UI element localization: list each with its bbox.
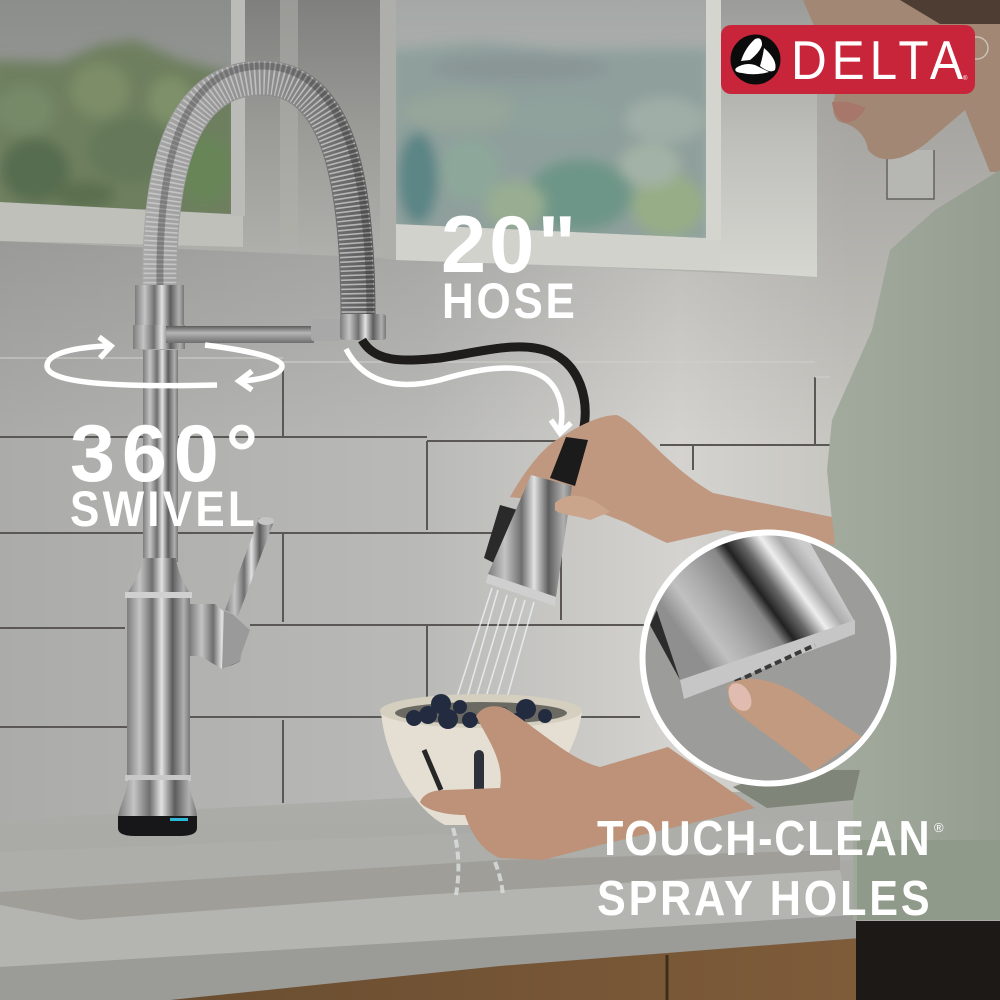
faucet lower body xyxy=(118,350,197,836)
faucet collar and swing arm xyxy=(133,285,386,349)
sweater cuff xyxy=(733,770,860,808)
sprayer head xyxy=(484,437,588,606)
label: touch-clean spray holes: SPRAY HOLES xyxy=(597,870,930,926)
Delta logo mark xyxy=(730,34,780,84)
window frame and sill xyxy=(0,0,817,277)
left window view of trees xyxy=(0,0,231,214)
colander bowl xyxy=(380,694,582,825)
upper hand holding sprayer xyxy=(510,415,835,545)
spring hose arc xyxy=(160,66,370,318)
black pull-down hose xyxy=(362,340,585,432)
tile behind woman xyxy=(887,150,934,199)
inset circle: touch-clean close-up xyxy=(642,525,894,784)
label: 20 inch hose xyxy=(441,200,576,329)
label: 360 swivel: SWIVEL xyxy=(70,480,255,537)
wooden cabinet xyxy=(170,938,860,1000)
woman sweater xyxy=(733,170,1000,920)
Delta logo badge: DELTA xyxy=(791,31,963,92)
label: 360 swivel: 360° xyxy=(70,409,258,499)
Delta logo badge: ® xyxy=(963,75,968,82)
blueberries xyxy=(406,694,552,729)
hose length arrow xyxy=(346,349,571,433)
faucet xyxy=(118,66,585,836)
water spray xyxy=(456,588,534,712)
water dripping below bowl xyxy=(453,828,503,897)
label: touch-clean spray holes xyxy=(597,810,944,926)
label: 20 inch hose: 20" xyxy=(441,200,576,290)
upper hand fingers xyxy=(555,496,610,520)
swivel rotation arrow xyxy=(47,337,282,390)
countertop and sink xyxy=(0,790,860,1000)
Delta logo badge xyxy=(721,25,975,94)
woman dark trousers xyxy=(856,921,1000,1000)
woman face xyxy=(803,0,1000,172)
label: touch-clean spray holes: ® xyxy=(934,820,944,835)
faucet handle xyxy=(190,517,274,669)
right window view of trees xyxy=(390,0,710,245)
label: 20 inch hose: HOSE xyxy=(442,272,575,329)
lower hand and forearm xyxy=(420,706,755,860)
sweater hem ribbing xyxy=(857,840,1000,920)
label: touch-clean spray holes: TOUCH-CLEAN xyxy=(597,810,930,866)
